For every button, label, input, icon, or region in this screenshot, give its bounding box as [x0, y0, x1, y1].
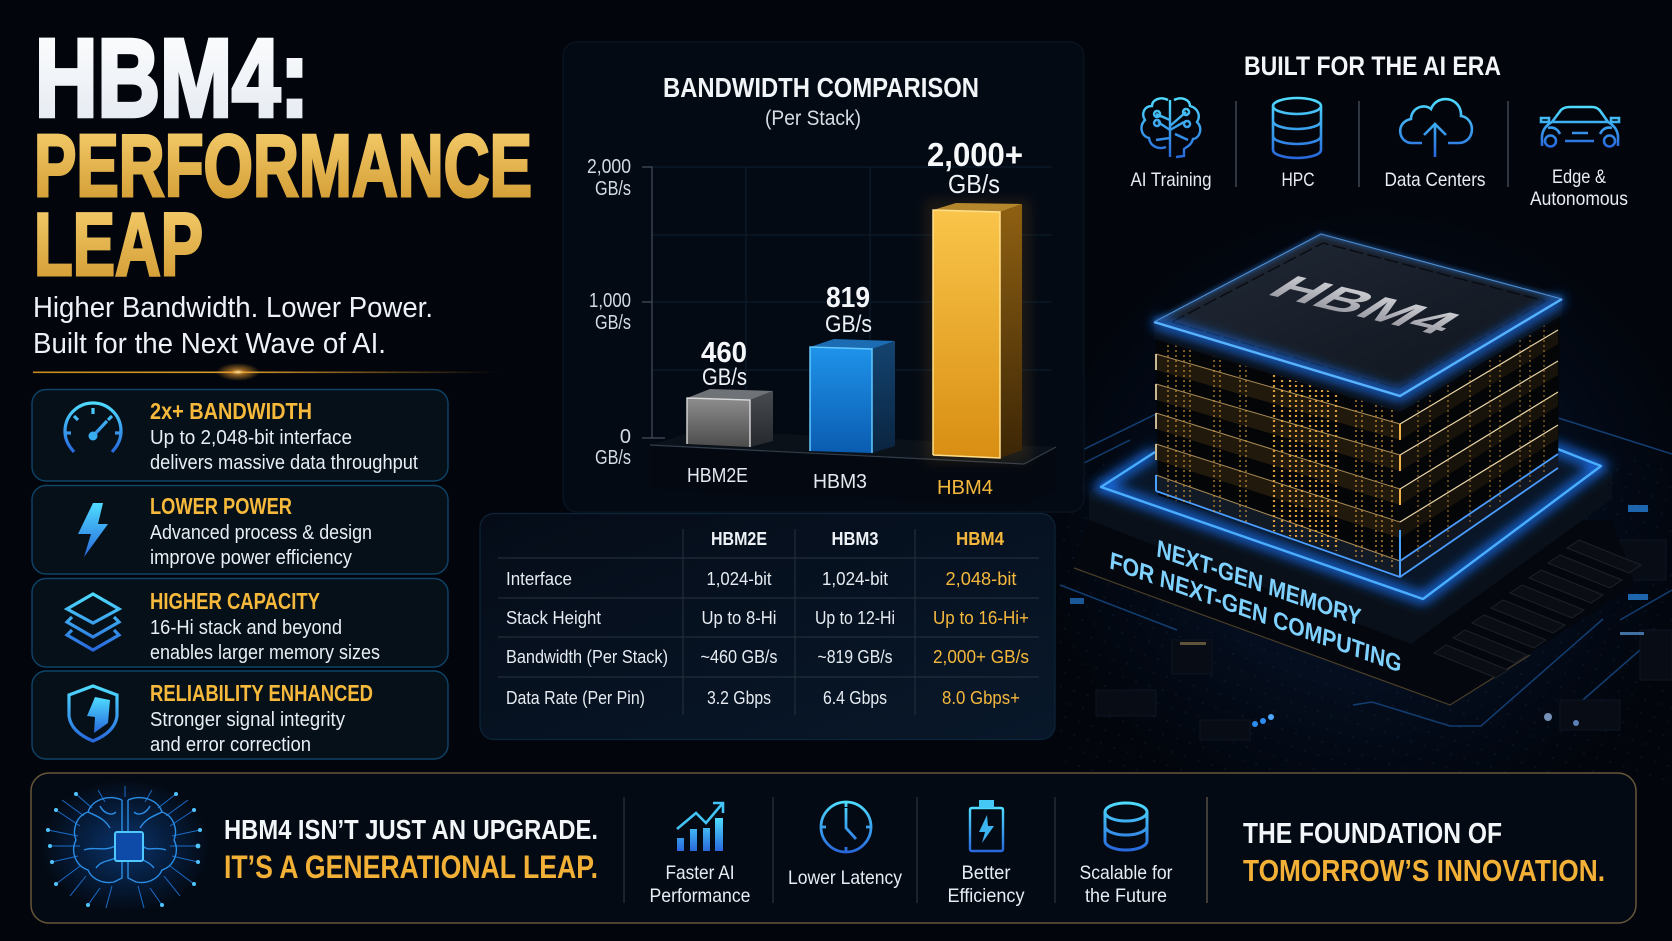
illustration: HBM4 chip stack	[1074, 234, 1641, 705]
item: scalable for the future: Scalable for	[1080, 862, 1173, 884]
memory layers	[1156, 315, 1560, 577]
bar categories: HBM2E	[687, 464, 748, 487]
card: lower power	[32, 486, 448, 574]
row: data rate: Data Rate (Per Pin)	[506, 687, 645, 708]
card: higher capacity	[32, 578, 448, 667]
callout: generational leap: IT’S A GENERATIONAL LEAP.	[224, 849, 598, 885]
chip label: HBM4	[1256, 269, 1475, 341]
axis labels: 0	[620, 426, 631, 448]
callout: foundation of innovation: TOMORROW’S INNOVATION.	[1243, 853, 1605, 888]
row: stack height	[506, 607, 1029, 628]
panel: comparison table	[480, 514, 1055, 740]
row: bandwidth: ~819 GB/s	[818, 646, 892, 667]
row: bandwidth: 2,000+ GB/s	[933, 646, 1029, 667]
item: data centers	[1384, 99, 1486, 191]
item: faster AI performance: Performance	[650, 885, 750, 907]
heading: BUILT FOR THE AI ERA	[1244, 51, 1501, 81]
bar categories: HBM3	[813, 470, 867, 493]
bar: HBM4	[925, 200, 1030, 462]
item: AI training: AI Training	[1130, 169, 1212, 191]
card: lower power: Advanced process & design	[150, 522, 372, 544]
row: interface: 2,048-bit	[946, 568, 1016, 589]
row: stack height: Stack Height	[506, 607, 601, 628]
axis labels: GB/s	[595, 312, 631, 334]
table header: HBM4	[956, 529, 1004, 549]
slab caption: NEXT-GEN MEMORY	[1155, 535, 1362, 632]
item: HPC	[1273, 98, 1321, 191]
bar values	[701, 136, 1023, 391]
bar: HBM3	[810, 339, 895, 453]
item: scalable for the future: the Future	[1085, 885, 1167, 907]
table header: HBM3	[832, 529, 878, 549]
card: higher capacity: 16-Hi stack and beyond	[150, 617, 342, 639]
bar categories	[687, 464, 993, 499]
row: data rate	[506, 687, 1020, 708]
top lid	[1154, 234, 1562, 412]
bar values: GB/s	[825, 311, 872, 338]
card: 2x+ bandwidth: 2x+ BANDWIDTH	[150, 398, 312, 424]
row: data rate: 8.0 Gbps+	[942, 687, 1020, 708]
table header: HBM2E	[711, 529, 767, 549]
subtitle	[33, 292, 433, 360]
lower board	[1074, 520, 1635, 705]
chart heading: (Per Stack)	[765, 107, 861, 130]
item: lower latency	[788, 802, 902, 889]
bar values: GB/s	[948, 169, 1000, 199]
card: higher capacity: HIGHER CAPACITY	[150, 588, 320, 614]
item: data centers: Data Centers	[1384, 169, 1486, 191]
callout: generational leap: HBM4 ISN’T JUST AN UPGRADE.	[224, 814, 598, 845]
card: 2x+ bandwidth	[32, 390, 448, 481]
panel: feature cards	[32, 390, 448, 759]
bar values: GB/s	[702, 364, 747, 391]
panel: bandwidth comparison chart	[563, 42, 1084, 512]
chart heading	[663, 72, 979, 130]
bottom banner	[31, 773, 1636, 923]
card: lower power: improve power efficiency	[150, 547, 352, 569]
card: reliability enhanced: and error correction	[150, 734, 311, 756]
gold signal dots right	[1418, 320, 1544, 560]
card: 2x+ bandwidth: delivers massive data throughput	[150, 452, 418, 474]
row: stack height: Up to 12-Hi	[815, 607, 895, 628]
chart heading: BANDWIDTH COMPARISON	[663, 72, 979, 103]
axis labels: 2,000	[587, 156, 631, 178]
title	[34, 17, 532, 294]
row: interface: 1,024-bit	[706, 568, 772, 589]
table header	[711, 529, 1004, 549]
interposer slab	[1089, 350, 1612, 644]
panel: built for the AI era	[1130, 51, 1628, 210]
title: LEAP	[34, 194, 203, 294]
row: stack height: Up to 16-Hi+	[933, 607, 1029, 628]
row: interface: 1,024-bit	[822, 568, 888, 589]
card: higher capacity: enables larger memory sizes	[150, 642, 380, 664]
card: 2x+ bandwidth: Up to 2,048-bit interface	[150, 427, 352, 449]
item: faster AI performance: Faster AI	[666, 862, 734, 884]
chart grid and axis	[642, 167, 1052, 440]
gold signal dots left	[1168, 340, 1392, 570]
item: edge and autonomous: Autonomous	[1530, 188, 1628, 210]
item: AI training	[1130, 98, 1212, 191]
callout: generational leap	[224, 814, 598, 885]
row: interface	[506, 568, 1016, 589]
card: reliability enhanced	[32, 671, 448, 759]
callout: foundation of innovation	[1243, 818, 1605, 888]
item: faster AI performance	[650, 803, 750, 907]
callout: foundation of innovation: THE FOUNDATION OF	[1243, 818, 1502, 850]
item: lower latency: Lower Latency	[788, 867, 902, 889]
stacked die bands	[1156, 330, 1558, 577]
row: bandwidth	[506, 646, 1029, 667]
card: lower power: LOWER POWER	[150, 493, 292, 519]
row: data rate: 3.2 Gbps	[707, 687, 771, 708]
chart floor	[650, 430, 1056, 505]
subtitle: Higher Bandwidth. Lower Power.	[33, 292, 433, 324]
connector bars	[1434, 540, 1641, 678]
title: PERFORMANCE	[34, 116, 532, 215]
icon: circuit brain	[40, 780, 210, 912]
bar categories: HBM4	[937, 476, 993, 499]
item: edge and autonomous: Edge &	[1552, 166, 1606, 188]
card: reliability enhanced: Stronger signal integrity	[150, 709, 345, 731]
axis labels: 1,000	[589, 290, 631, 312]
row: interface: Interface	[506, 568, 572, 589]
bar values: 2,000+	[927, 136, 1023, 173]
title: HBM4:	[35, 17, 309, 140]
bar values: 460	[701, 337, 747, 369]
axis labels	[587, 156, 631, 469]
item: scalable for the future	[1080, 803, 1173, 907]
row: stack height: Up to 8-Hi	[702, 607, 776, 628]
slab caption: FOR NEXT-GEN COMPUTING	[1108, 547, 1403, 679]
item: HPC: HPC	[1282, 169, 1314, 191]
bar: HBM2E	[687, 389, 773, 447]
subtitle: Built for the Next Wave of AI.	[33, 328, 386, 360]
card: reliability enhanced: RELIABILITY ENHANCED	[150, 680, 373, 706]
row: bandwidth: ~460 GB/s	[700, 646, 778, 667]
item: better efficiency: Better	[962, 862, 1011, 884]
gold divider	[33, 363, 500, 381]
row: bandwidth: Bandwidth (Per Stack)	[506, 646, 668, 667]
bar values: 819	[826, 282, 870, 314]
axis labels: GB/s	[595, 178, 631, 200]
row: data rate: 6.4 Gbps	[823, 687, 887, 708]
item: edge and autonomous	[1530, 107, 1628, 210]
axis labels: GB/s	[595, 447, 631, 469]
item: better efficiency	[948, 800, 1025, 907]
item: better efficiency: Efficiency	[948, 885, 1025, 907]
